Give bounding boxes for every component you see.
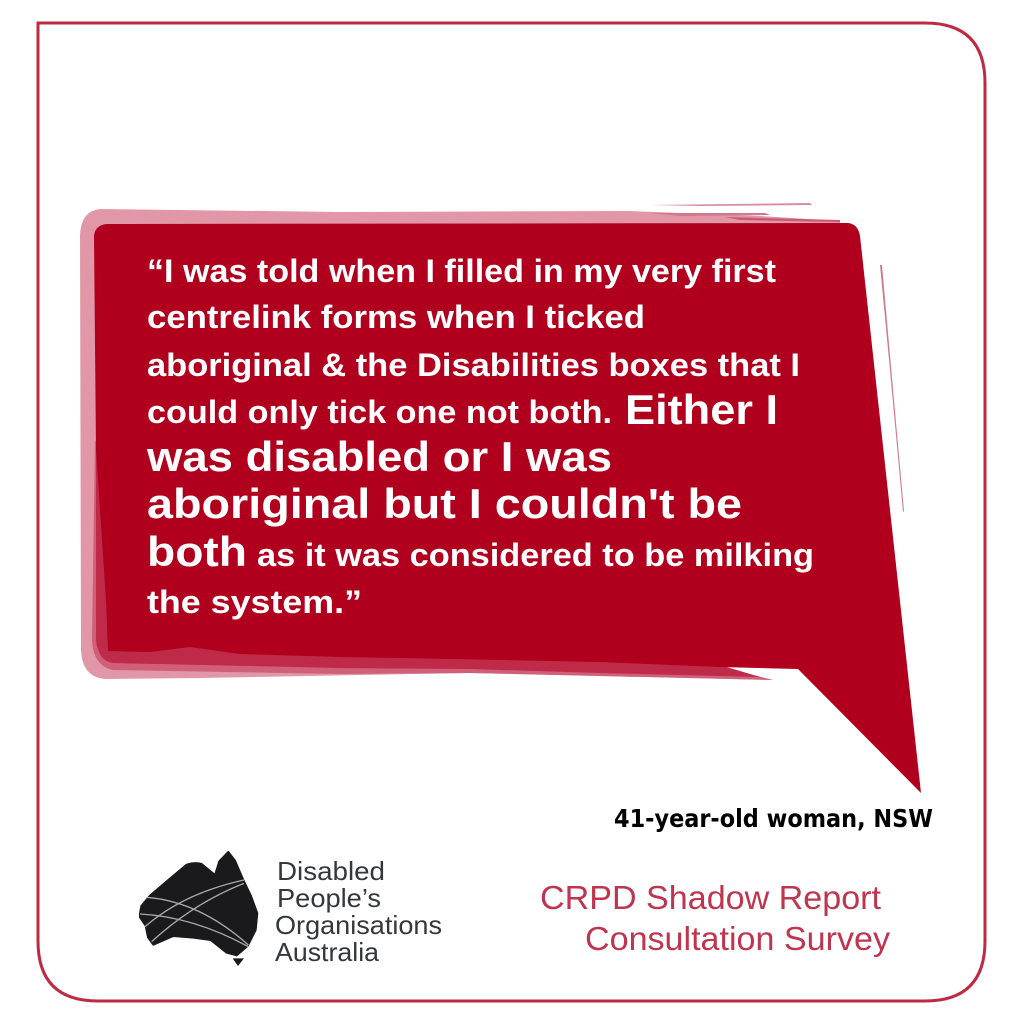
- quote text: aboriginal but I couldn't be: [147, 480, 742, 527]
- quote text: Either I: [625, 386, 778, 433]
- quote text: as it was considered to be milking: [257, 537, 814, 573]
- quote text: both: [147, 528, 247, 575]
- quote text: centrelink forms when I ticked: [147, 299, 645, 335]
- quote text: “I was told when I filled in my very first: [147, 253, 776, 289]
- organisation name: People’s: [277, 883, 381, 913]
- speech bubble: [80, 203, 921, 793]
- organisation name: Australia: [275, 937, 380, 967]
- organisation name: [275, 856, 442, 967]
- attribution: 41-year-old woman, NSW: [614, 804, 933, 833]
- organisation name: Disabled: [277, 856, 385, 886]
- quote text: aboriginal & the Disabilities boxes that I: [147, 347, 800, 383]
- quote text: the system.”: [147, 584, 362, 620]
- quote text: was disabled or I was: [146, 433, 612, 480]
- icon: Australia logo: [140, 852, 257, 966]
- report title: [540, 879, 891, 957]
- report title: Consultation Survey: [585, 920, 891, 957]
- quote text: [146, 253, 814, 620]
- report title: CRPD Shadow Report: [540, 879, 881, 916]
- organisation name: Organisations: [275, 910, 442, 940]
- quote text: could only tick one not both.: [147, 394, 612, 430]
